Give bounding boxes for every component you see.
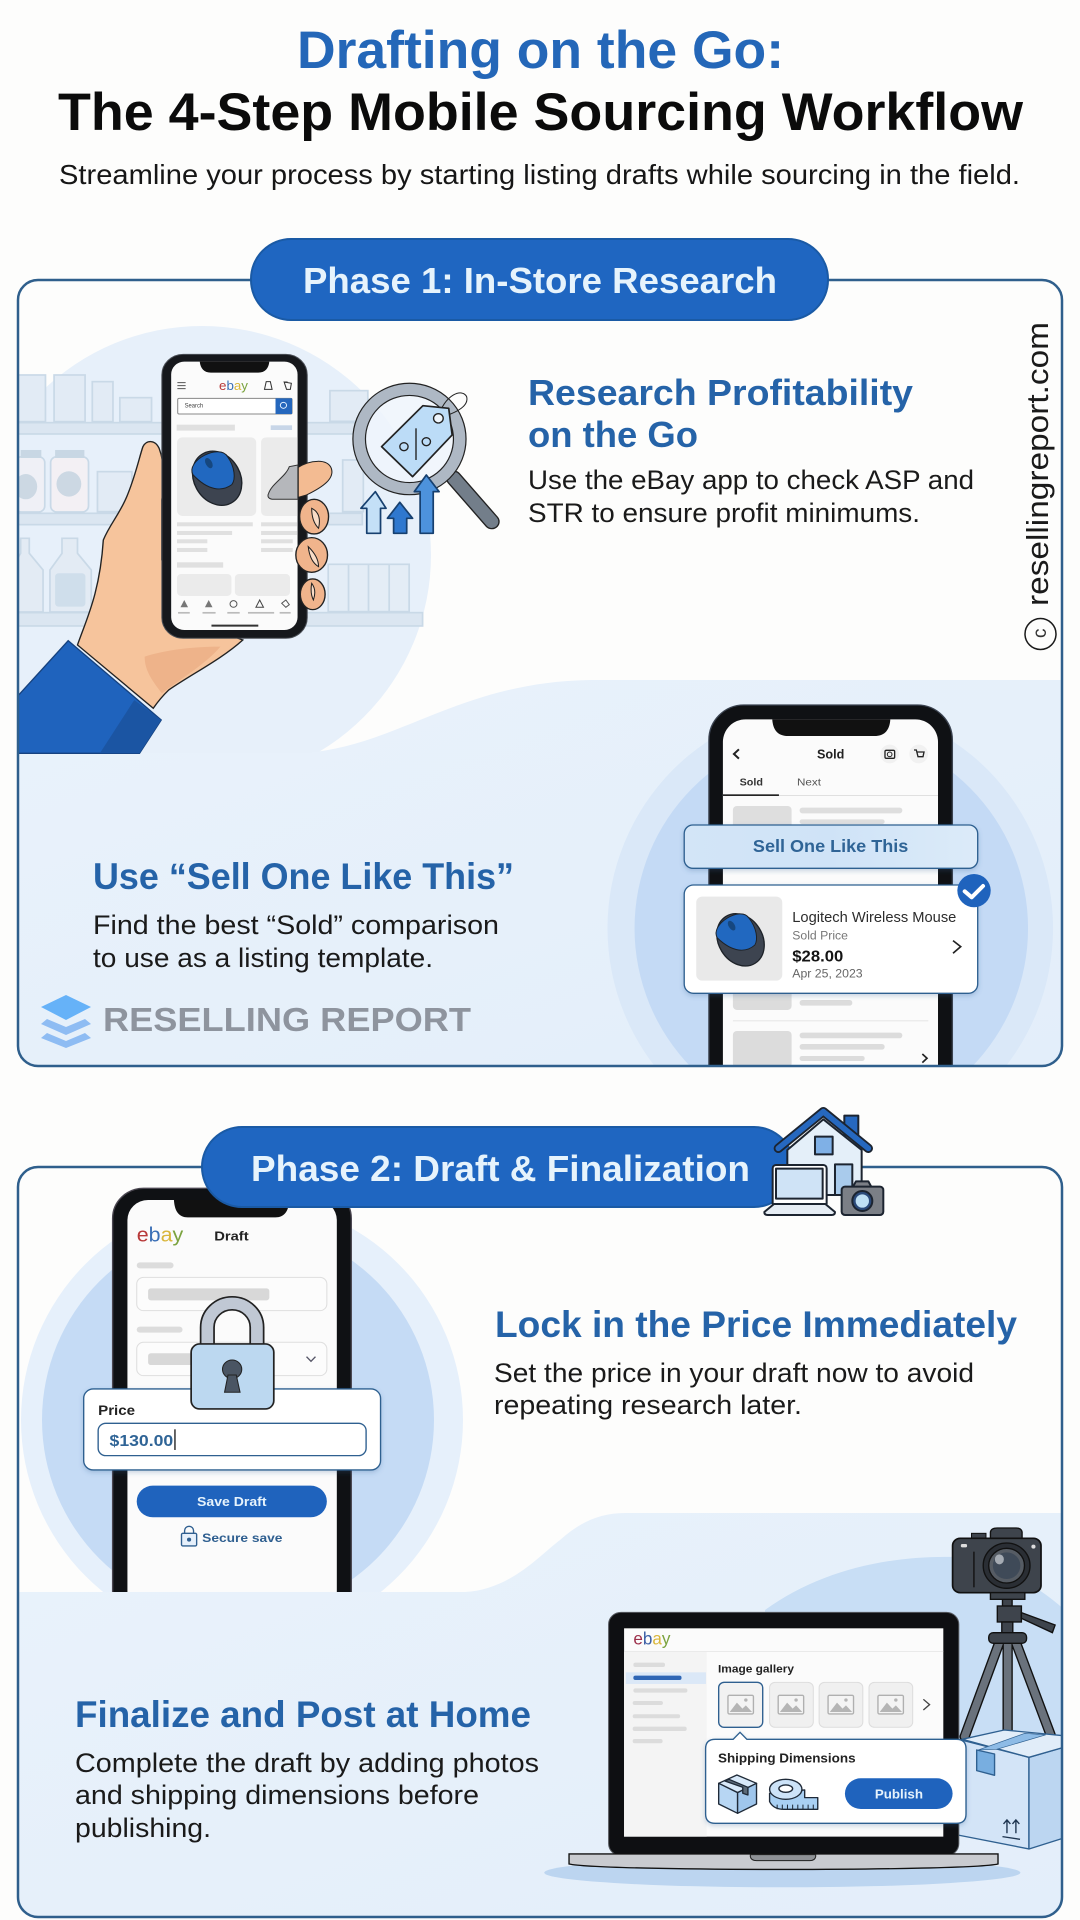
illustration: tripod camera and box	[544, 1528, 1066, 1887]
logo: reselling report	[41, 995, 471, 1048]
price label: Price	[98, 1403, 135, 1419]
sold listing card	[684, 885, 978, 993]
save draft button: Save Draft	[197, 1494, 267, 1509]
heading: research profitability: Research Profitability	[528, 372, 913, 413]
phase 1 pill: Phase 1: In-Store Research	[303, 260, 777, 301]
body: finalize and post: publishing.	[75, 1813, 211, 1843]
panel 2 background	[18, 1167, 1062, 1917]
section bars	[177, 425, 292, 431]
phase 1 pill	[251, 239, 828, 320]
phase 2 pill: Phase 2: Draft & Finalization	[251, 1148, 750, 1189]
sell one like this banner: Sell One Like This	[753, 836, 908, 856]
phone screen	[171, 362, 298, 630]
phone notch	[772, 719, 890, 736]
watermark: resellingreport.com: c	[1030, 628, 1051, 638]
camera	[953, 1528, 1041, 1599]
small laptop	[764, 1165, 835, 1215]
box icon	[719, 1775, 757, 1813]
illustration: store shelves	[10, 375, 423, 626]
chimney	[844, 1116, 858, 1136]
laptop shadow	[544, 1858, 1020, 1887]
draft label: Draft	[214, 1229, 249, 1244]
circles behind phone	[608, 742, 1053, 1065]
panel 1 border	[18, 280, 1062, 1066]
secure save	[181, 1526, 283, 1546]
sleeve	[17, 641, 161, 753]
phone screen	[723, 719, 938, 1099]
product text bars	[177, 522, 298, 596]
hand palm and thumb	[77, 442, 243, 708]
palm shadow	[145, 647, 220, 693]
panel 1 background	[18, 280, 1062, 1066]
tape measure icon	[770, 1779, 818, 1809]
phone screen	[127, 1200, 337, 1620]
screen title: Sold	[817, 747, 844, 761]
lower background wave	[18, 680, 1065, 1066]
icon: magnifier with price tag and arrows	[359, 389, 492, 533]
body: sell one like this: Find the best “Sold” comparison	[93, 910, 499, 940]
shipping dimensions card	[706, 1732, 966, 1823]
watermark: resellingreport.com: resellingreport.com	[1020, 322, 1055, 606]
panel: phase 2	[18, 1167, 1066, 1917]
image gallery label: Image gallery	[718, 1664, 795, 1676]
window	[815, 1137, 833, 1154]
card title: Shipping Dimensions	[718, 1750, 856, 1765]
heading: finalize and post: Finalize and Post at Home	[75, 1694, 531, 1735]
card chevron	[953, 941, 961, 953]
home indicator	[211, 625, 258, 627]
ebay logo: ebay	[633, 1629, 671, 1648]
body: lock in the price: repeating research later.	[494, 1390, 802, 1420]
tripod legs	[965, 1643, 1051, 1737]
card box	[684, 885, 978, 993]
title line 1: Drafting on the Go:	[297, 21, 784, 80]
mouse	[707, 905, 774, 975]
product title: Logitech Wireless Mouse	[792, 910, 956, 926]
tab sold: Sold	[740, 777, 763, 788]
lower listing rows	[733, 990, 928, 1068]
heading: lock in the price: Lock in the Price Immediately	[495, 1304, 1017, 1345]
body: finalize and post: and shipping dimensions before	[75, 1780, 479, 1810]
caret	[174, 1429, 176, 1450]
fingers	[296, 499, 329, 610]
panel 2 clipped artwork	[18, 1188, 1066, 1917]
sidebar	[624, 1651, 943, 1837]
body: sell one like this	[93, 910, 499, 973]
laptop trackpad notch	[750, 1855, 816, 1861]
sell one like this banner	[684, 825, 978, 868]
menu icon	[177, 383, 186, 389]
illustration: hand holding phone	[17, 354, 332, 753]
ebay logo: ebay	[219, 378, 249, 393]
heading: sell one like this: Use “Sell One Like This”	[93, 856, 514, 897]
magnifier ring	[359, 389, 460, 489]
price tag	[382, 393, 467, 477]
house body	[787, 1119, 862, 1195]
price card with lock	[84, 1303, 381, 1470]
price input	[98, 1423, 366, 1456]
panel 2 border	[18, 1167, 1062, 1917]
sleeve shading	[100, 700, 161, 753]
phone frame	[162, 354, 307, 638]
save draft button	[137, 1486, 327, 1517]
gray object in fingers	[268, 465, 298, 499]
tab next: Next	[797, 777, 821, 788]
price value: $130.00	[110, 1432, 173, 1450]
phase 2 pill	[202, 1127, 794, 1207]
icon: home with laptop and camera	[764, 1112, 883, 1215]
listing row	[733, 806, 902, 833]
secure save: Secure save	[202, 1531, 283, 1545]
background circle behind hand	[19, 326, 431, 753]
phone illustration: sold listing	[608, 704, 1053, 1065]
circle behind camera	[765, 1557, 1065, 1800]
laptop lid	[609, 1612, 959, 1856]
body: sell one like this: to use as a listing template.	[93, 943, 433, 973]
account and cart icons	[264, 382, 291, 389]
body: lock in the price: Set the price in your draft now to avoid	[494, 1358, 974, 1388]
mouse image	[191, 450, 242, 506]
image gallery thumbnails	[719, 1682, 930, 1727]
growth arrows	[361, 475, 439, 533]
price: $28.00	[792, 949, 843, 966]
index finger	[298, 461, 332, 497]
small camera	[842, 1181, 883, 1215]
body: finalize and post	[75, 1748, 539, 1843]
price card box	[84, 1389, 381, 1470]
heading: research profitability	[528, 372, 913, 455]
door	[835, 1164, 852, 1195]
bottom nav icons	[178, 600, 291, 614]
body: lock in the price	[494, 1358, 974, 1420]
magnifier handle	[454, 478, 492, 522]
body: research profitability: STR to ensure profit minimums.	[528, 498, 920, 528]
panel 1 clipped artwork	[0, 326, 1065, 1152]
ebay logo: ebay	[137, 1225, 184, 1247]
check badge	[957, 874, 991, 907]
search bar	[178, 398, 292, 414]
laptop screen	[624, 1628, 943, 1837]
body: finalize and post: Complete the draft by adding photos	[75, 1748, 539, 1778]
mouse thumbnail	[696, 897, 782, 981]
logo icon: stacked layers	[41, 995, 91, 1048]
date: Apr 25, 2023	[792, 967, 863, 981]
sold price label: Sold Price	[792, 928, 848, 942]
lock icon	[191, 1303, 274, 1409]
publish button	[845, 1778, 953, 1809]
panel: phase 1	[16, 278, 1064, 1068]
phone notch	[200, 362, 269, 373]
phone frame	[113, 1188, 351, 1622]
phone frame	[709, 705, 952, 1105]
subtitle: Streamline your process by starting listing drafts while sourcing in the field.	[59, 159, 1020, 190]
tab underline	[723, 794, 938, 796]
circles behind draft phone	[21, 1199, 463, 1641]
heading: research profitability: on the Go	[528, 414, 698, 455]
product cards	[177, 437, 298, 516]
body: research profitability	[528, 465, 974, 528]
tripod head	[989, 1599, 1055, 1643]
this-way-up arrows on box	[1002, 1820, 1020, 1839]
logo text: RESELLING REPORT	[103, 1001, 471, 1038]
form fields	[137, 1262, 327, 1376]
phone notch	[174, 1200, 289, 1217]
back chevron	[734, 749, 739, 759]
search bar: Search	[185, 403, 203, 410]
body: research profitability: Use the eBay app to check ASP and	[528, 465, 974, 495]
shipping box	[958, 1730, 1066, 1849]
camera and cart icons	[880, 745, 928, 763]
card box	[706, 1732, 966, 1823]
title line 2: The 4-Step Mobile Sourcing Workflow	[58, 83, 1024, 142]
row chevron	[922, 1054, 927, 1063]
lower background wave	[18, 1513, 1065, 1917]
publish button: Publish	[875, 1786, 923, 1801]
roof	[778, 1112, 868, 1148]
laptop base	[569, 1854, 998, 1869]
phone illustration: draft	[113, 1188, 351, 1622]
